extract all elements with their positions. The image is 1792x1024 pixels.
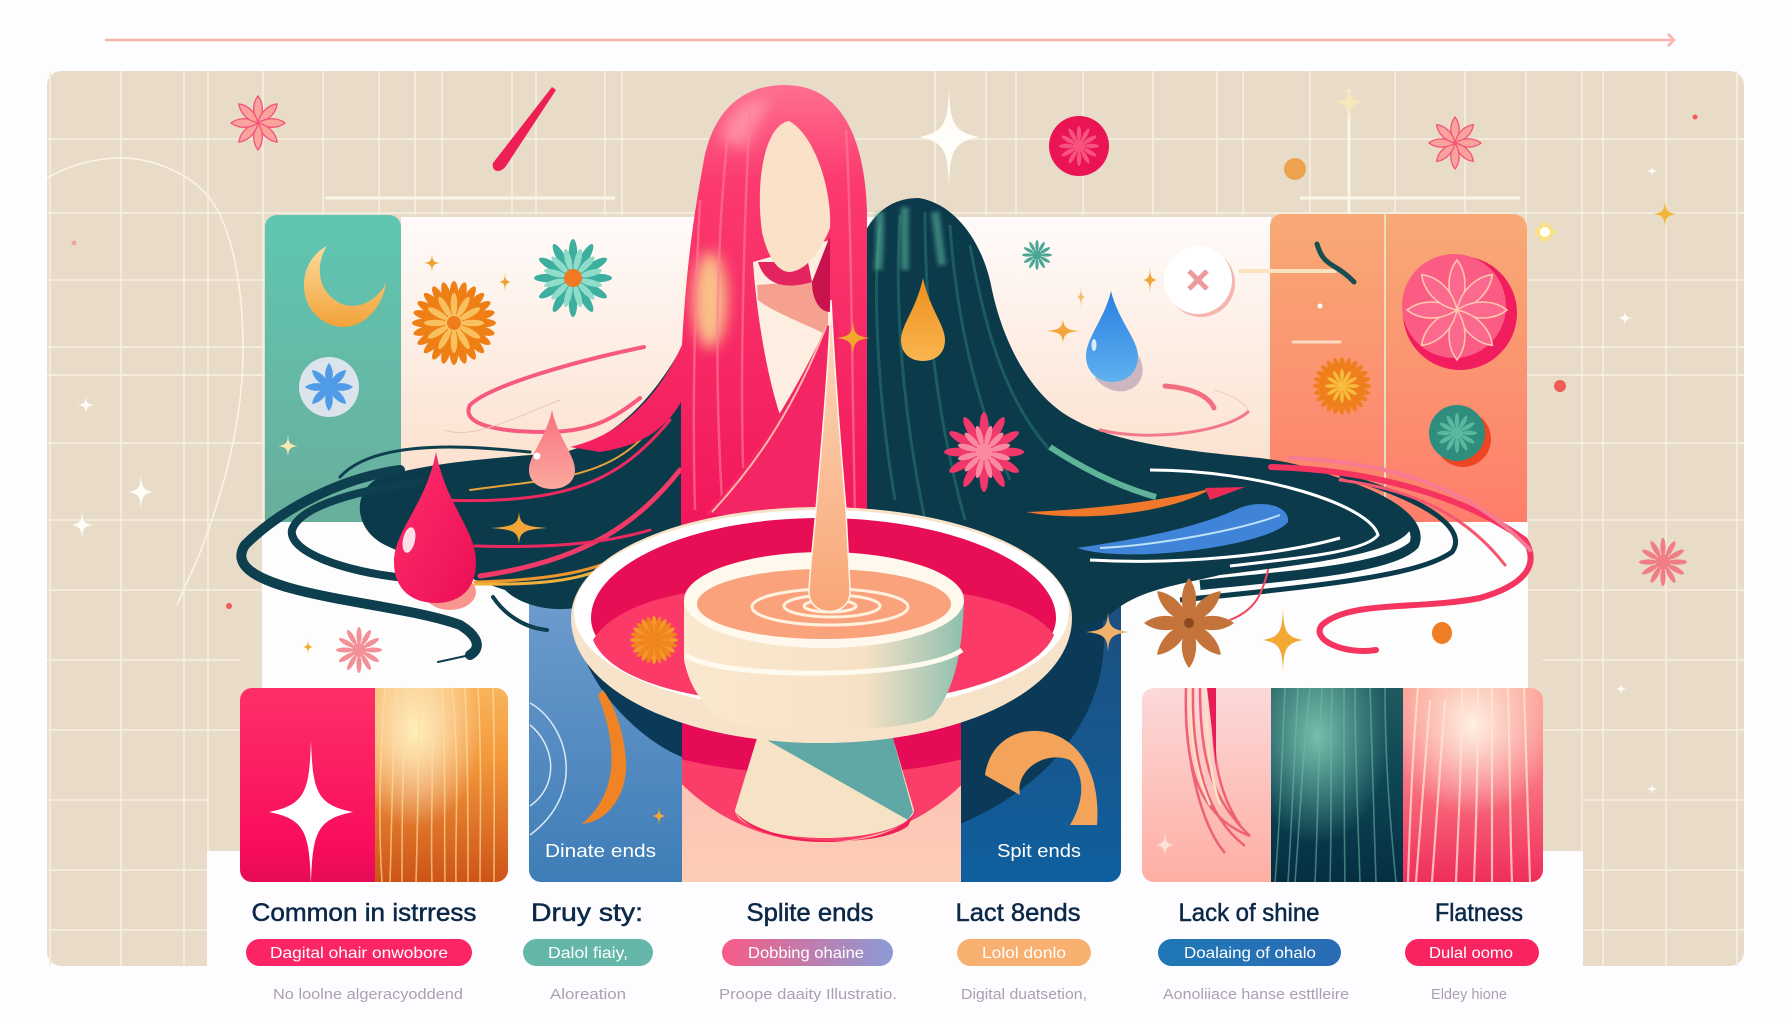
icon: crescent moon [304,246,386,327]
icon: blue sparkle [1086,612,1130,652]
headings: Lact 8ends [956,899,1080,927]
icon: blue flower circle [299,357,359,417]
icon: anise star [1144,578,1234,668]
icon: swoosh [1100,386,1248,435]
stream of product [809,300,850,612]
icon: white star [269,740,353,884]
pill labels: Dobbing ohaine [748,945,864,962]
pill labels [270,945,1513,962]
neck and chest [753,240,830,418]
icon: white sparkle [919,87,979,187]
pill labels: Dagital ohair onwobore [270,945,448,962]
icon: teal circle [1429,405,1491,467]
pills [246,939,1539,966]
icon: orange bead [1432,622,1452,644]
icon: orange dot [1284,158,1306,180]
front lock [705,320,838,515]
headings: Common in istrress [252,899,476,927]
liquid [697,569,951,639]
icon: lower left flower [336,627,382,673]
labels row [246,899,1539,1003]
icon: gold spark on stream [836,320,870,356]
icon: gold sparkle right [1263,608,1303,672]
icon: pink flower on hair [944,412,1024,492]
pill labels: Dulal oomo [1429,945,1513,962]
icon: orange flower [403,272,505,374]
fine curved line [47,158,243,605]
icon: big pink flower circle [1402,254,1517,370]
icon: small teal flower [1022,240,1052,270]
pill labels: Dalol fiaiy, [548,945,628,962]
top arrow [105,34,1674,46]
stem [735,735,916,842]
icon: large red droplet [394,452,476,610]
icon: top-left flower [231,96,285,150]
panel: footer card [207,851,1583,1024]
plate [571,507,1072,743]
dark hair: right mass [866,198,1456,640]
bowl [571,507,1072,842]
cup rim [684,552,964,648]
icon: blue droplet [1086,291,1143,391]
icon: red flower circle [1049,116,1109,176]
icon: pale sparkle [1335,82,1363,122]
panel: right swatch [1142,688,1543,882]
icon: gold sparkle on hair [491,512,547,544]
icon: red stick [493,87,556,171]
panel: blue swatch left [529,600,682,882]
headings: Flatness [1435,899,1523,927]
icon: orange droplet [901,278,945,361]
icons: small dots [72,114,1698,609]
captions: No loolne algeracyoddend [273,986,463,1003]
panel: central white area [262,217,1528,852]
captions: Aonoliiace hanse esttlleire [1163,986,1349,1003]
icon: lower left gold sparkle [303,639,313,655]
icon: close button [1164,246,1235,317]
panel: orange column right [1386,214,1527,522]
headings: Splite ends [746,899,874,927]
pink looping strand [445,347,644,433]
icon: teal panel sparkle [278,434,298,458]
label: panel captions: Dinate ends [545,841,656,861]
label: panel captions: Spit ends [997,841,1081,861]
icons: gold sparkles [424,253,511,292]
captions [273,986,1507,1003]
icon: orange streak [1026,487,1245,516]
pill labels: Lolol donlo [982,945,1066,962]
captions: Aloreation [550,986,626,1003]
panel: teal column [265,215,401,522]
cup body [684,600,964,730]
panel: orange column left [1270,214,1384,522]
captions: Proope daaity Illustratio. [719,986,897,1003]
label: panel captions [545,841,1081,861]
right hair: pink strands [1230,458,1531,651]
captions: Eldey hione [1431,986,1507,1003]
icon: yellow diamond [1534,221,1556,243]
panel: peach centre with red shadow [682,722,961,882]
icon: pale sparkle [1156,831,1174,859]
pill labels: Doalaing of ohalo [1184,945,1316,962]
icon: small orange star [625,611,683,669]
face [760,121,830,272]
icon: pink droplet [529,410,575,489]
icons: sparkles near droplets [1046,266,1157,344]
pink hair with face [570,85,867,525]
swirls [752,589,908,625]
icons: white sparkles [71,165,1658,795]
headings [252,899,1523,927]
icon: right pink flower [1639,538,1687,586]
neck shadow [757,280,828,335]
icon: orange column flower [1306,350,1378,422]
icon: hair scribble with streaks [1240,244,1354,342]
icon: blue swirl [1077,504,1288,554]
captions: Digital duatsetion, [961,986,1087,1003]
panel: left swatch [240,688,508,884]
headings: Lack of shine [1178,899,1320,927]
icon: top-right flower [1429,117,1481,169]
icon: teal flower [534,239,612,317]
panel: dark blue swatch right [961,606,1121,882]
dark hair: left mass and strands [241,345,700,662]
icon: yellow sparkle [1653,200,1677,228]
headings: Druy sty: [531,899,643,927]
